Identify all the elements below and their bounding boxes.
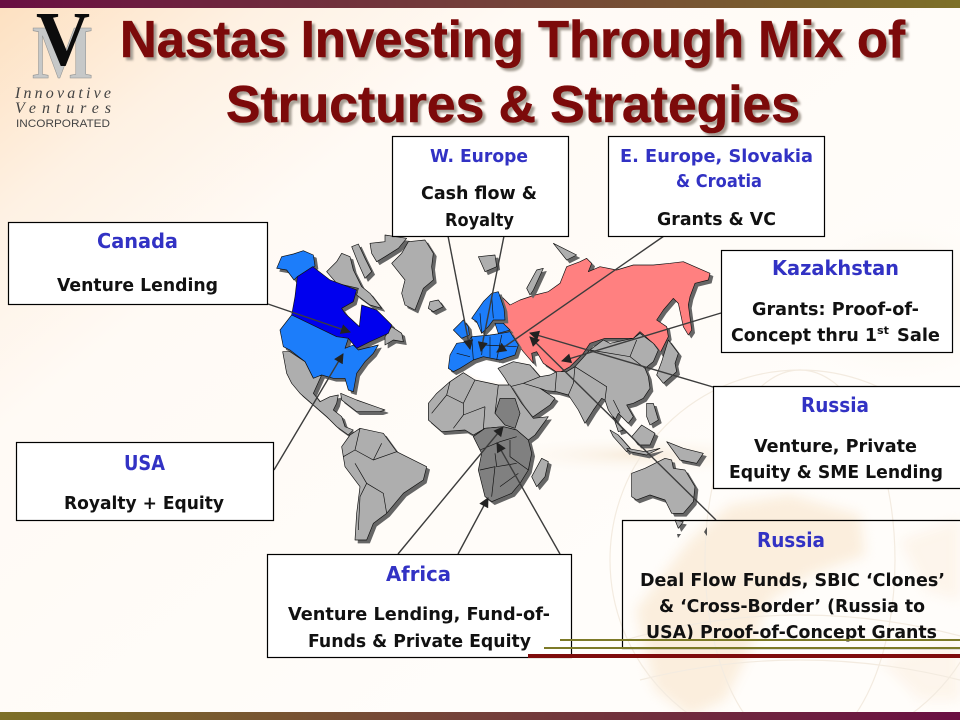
text: Kazakhstan strategy (731, 299, 940, 346)
text: Russia venture strategy (729, 436, 943, 483)
logo: Innovative Ventures Incorporated: Innovative (14, 85, 111, 102)
heading: E. Europe, Slovakia & Croatia: E. Europe, Slovakia (620, 146, 813, 167)
text: E. Europe strategy: Grants & VC (657, 209, 776, 230)
map: Russia (500, 258, 710, 373)
panel: Africa (268, 554, 572, 658)
text: Kazakhstan strategy: Sale (897, 325, 940, 346)
heading: Kazakhstan: Kazakhstan (772, 256, 899, 280)
heading: E. Europe, Slovakia & Croatia (620, 146, 813, 192)
heading: Russia: Russia (801, 393, 869, 417)
leader arrows (268, 236, 721, 554)
text: Russia deal flow strategy (640, 570, 945, 643)
text: W. Europe strategy (421, 183, 537, 231)
map: Europe (448, 243, 577, 372)
title: Structures & Strategies (226, 76, 800, 134)
heading: USA: USA (124, 451, 165, 475)
text: Russia deal flow strategy: USA) Proof-of-Concept Grants (646, 622, 937, 643)
text: Russia deal flow strategy: Deal Flow Funds, SBIC ‘Clones’ (640, 570, 945, 591)
logo: Innovative Ventures Incorporated: Ventures (15, 100, 111, 117)
panel: Kazakhstan (722, 250, 952, 352)
text: Africa strategy: Funds & Private Equity (308, 631, 531, 652)
text: W. Europe strategy: Cash flow & (421, 183, 537, 204)
logo: Innovative Ventures Incorporated: M (32, 11, 93, 95)
text: USA strategy: Royalty + Equity (64, 493, 224, 514)
map: Asia and Australia (498, 333, 703, 528)
top bar (0, 0, 960, 8)
world map (277, 235, 710, 540)
map: Mediterranean gap (466, 357, 520, 383)
heading: E. Europe, Slovakia & Croatia: & Croatia (676, 171, 762, 192)
logo: Innovative Ventures Incorporated (14, 0, 111, 130)
text: Russia deal flow strategy: & ‘Cross-Border’ (Russia to (659, 596, 925, 617)
panel: USA (16, 442, 274, 520)
panel: Canada (8, 222, 268, 304)
panel: Russia venture (714, 386, 960, 488)
text: Russia venture strategy: Equity & SME Lending (729, 462, 943, 483)
text: W. Europe strategy: Royalty (445, 210, 514, 231)
map: Americas and Greenland (277, 235, 443, 540)
panel: Russia deal flow (622, 520, 960, 648)
text: Africa strategy: Venture Lending, Fund-of- (288, 604, 550, 625)
title: Nastas Investing Through Mix of (120, 11, 906, 69)
text: Africa strategy (288, 604, 550, 652)
map: small islands (677, 527, 707, 538)
bottom bar (0, 712, 960, 720)
heading: Russia: Russia (757, 528, 825, 552)
panel: W. Europe (392, 136, 568, 236)
heading: Canada: Canada (97, 229, 178, 253)
panel: E. Europe, Slovakia & Croatia (608, 136, 824, 236)
heading: Africa: Africa (386, 562, 451, 586)
title (120, 11, 906, 134)
text: Kazakhstan strategy: st (877, 324, 889, 337)
text: Kazakhstan strategy: Grants: Proof-of- (752, 299, 919, 320)
logo: Innovative Ventures Incorporated: INCORPORATED (16, 118, 110, 130)
text: Canada strategy: Venture Lending (57, 275, 218, 296)
map: Africa (428, 373, 548, 502)
heading: W. Europe: W. Europe (430, 146, 528, 167)
text: Kazakhstan strategy: Concept thru 1 (731, 325, 877, 346)
text: Russia venture strategy: Venture, Private (754, 436, 917, 457)
